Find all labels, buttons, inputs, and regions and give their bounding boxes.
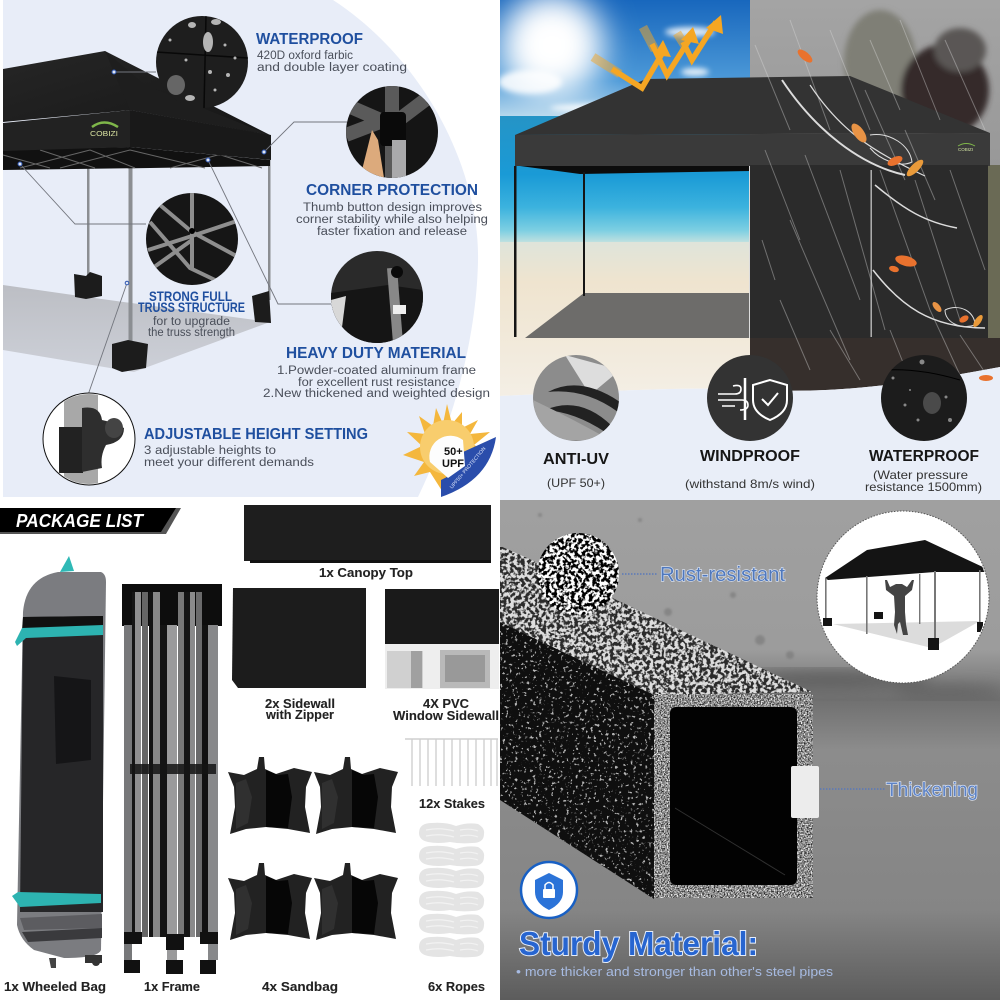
item: ropes (419, 823, 484, 957)
beach (500, 242, 750, 402)
inset person hanging (885, 580, 914, 635)
inset ground (833, 621, 980, 648)
storm sky (750, 0, 1000, 165)
heavy duty detail circle (331, 251, 423, 343)
waterproof label: (Water pressure (873, 468, 968, 482)
corner protection text: corner stability while also helping (296, 214, 488, 226)
truss detail circle (146, 193, 240, 285)
UPF badge: 50+ (444, 446, 463, 458)
tube hollow (670, 707, 797, 885)
waterproof text (256, 31, 407, 74)
rainy background (500, 500, 1000, 1000)
inset canopy (825, 540, 985, 580)
anti-UV label: (UPF 50+) (547, 476, 605, 490)
heavy duty text (263, 345, 490, 400)
UPF badge (403, 404, 496, 497)
scene background (498, 0, 1000, 402)
sky (500, 0, 750, 116)
label: sidewall: with Zipper (265, 708, 334, 722)
item: sidewall (232, 588, 366, 688)
trees (844, 10, 989, 136)
truss under canopy (3, 150, 262, 168)
heavy duty text: 1.Powder-coated aluminum frame (277, 365, 476, 377)
inset tent circle (817, 511, 989, 683)
truss text: for to upgrade (153, 316, 230, 328)
panel: tent features (3, 0, 496, 497)
tent logo (958, 144, 975, 152)
anti-UV label (543, 451, 609, 490)
rust-resistant callout: Rust-resistant (660, 564, 785, 586)
canopy valance (515, 133, 990, 166)
pale lower band (500, 367, 1000, 500)
heavy duty text: HEAVY DUTY MATERIAL (286, 345, 466, 362)
item: canopy top (244, 505, 491, 563)
adjustable height text: 3 adjustable heights to (144, 445, 276, 457)
thickening callout: Thickening (886, 780, 978, 801)
label: stakes: 12x Stakes (419, 797, 485, 811)
label: PVC window sidewall (393, 697, 499, 723)
inset poles and bags (825, 570, 981, 641)
corner protection detail circle (346, 86, 438, 180)
tent poles (514, 166, 585, 337)
label: sidewall: 2x Sidewall (265, 697, 335, 711)
waterproof label: WATERPROOF (869, 448, 979, 465)
thickening marker (791, 766, 819, 818)
truss text: the truss strength (148, 327, 235, 339)
rain (755, 20, 990, 380)
callout dots (18, 70, 266, 285)
sturdy material subtext: • more thicker and stronger than other's steel pipes (516, 965, 833, 979)
windproof icon (707, 355, 793, 441)
clouds and sun (498, 0, 715, 113)
label: canopy top: 1x Canopy Top (319, 566, 413, 580)
leaves (796, 47, 984, 328)
item: sandbags (228, 757, 398, 940)
shield badge (521, 862, 577, 918)
waterproof text: 420D oxford farbic (257, 50, 353, 62)
windproof label: WINDPROOF (700, 448, 800, 465)
panel: package list (0, 505, 499, 994)
corner protection text: Thumb button design improves (303, 202, 482, 214)
windproof label (685, 448, 815, 491)
waterproof label: resistance 1500mm) (865, 480, 982, 494)
item: folded frame (122, 584, 222, 974)
windproof label: (withstand 8m/s wind) (685, 477, 815, 491)
waterproof text: WATERPROOF (256, 31, 363, 48)
item: wheeled bag (12, 556, 106, 968)
sandbags (74, 272, 271, 372)
label: sidewall (265, 697, 335, 722)
wet ground (750, 338, 1000, 391)
package list heading (0, 508, 181, 534)
background droplets (538, 513, 794, 659)
panel: anti-UV, windproof, waterproof (498, 0, 1000, 500)
stray leaf (979, 375, 993, 381)
UPF badge: UPF50+ PROTECTION (449, 446, 488, 490)
zipped sidewall (750, 165, 988, 338)
panel: sturdy material (500, 500, 1000, 1000)
waterproof fabric circle (881, 355, 967, 441)
steel tube (500, 545, 815, 900)
truss text (138, 288, 245, 339)
canopy roof (515, 76, 990, 135)
side grass (988, 165, 1000, 338)
item: PVC window sidewall (385, 589, 499, 689)
logo (90, 122, 118, 138)
label: PVC window sidewall: Window Sidewall (393, 709, 499, 723)
corner protection text (296, 182, 488, 238)
package list heading: PACKAGE LIST (16, 511, 145, 531)
truss text: TRUSS STRUCTURE (138, 299, 245, 315)
anti-UV label: ANTI-UV (543, 451, 609, 468)
anti-UV circle (533, 355, 620, 441)
corner protection text: faster fixation and release (317, 226, 467, 238)
heavy duty text: 2.New thickened and weighted design (263, 388, 490, 400)
label: wheeled bag: 1x Wheeled Bag (4, 980, 106, 994)
callout lines (20, 72, 347, 395)
UPF badge: UPF (442, 458, 464, 470)
tent shade (525, 293, 750, 338)
waterproof label (865, 448, 982, 494)
label: ropes: 6x Ropes (428, 980, 485, 994)
adjustable height detail circle (43, 390, 135, 490)
ground shadow (3, 285, 270, 372)
label: frame: 1x Frame (144, 980, 200, 994)
logo: COBIZI (90, 131, 118, 138)
adjustable height text: meet your different demands (144, 457, 314, 469)
truss text: STRONG FULL (149, 288, 232, 304)
label: sandbag: 4x Sandbag (262, 980, 338, 994)
waterproof detail circle (156, 16, 248, 108)
arrow heads (654, 15, 723, 57)
canopy valance (3, 110, 130, 151)
rust-resistant close-up (535, 530, 621, 616)
back and side poles (87, 147, 270, 342)
corner protection text: CORNER PROTECTION (306, 182, 478, 199)
heavy duty text: for excellent rust resistance (298, 377, 455, 389)
tent illustration (3, 51, 271, 372)
sturdy material heading: Sturdy Material: (519, 925, 758, 962)
blurred wet ground (730, 670, 1000, 698)
waterproof text: and double layer coating (257, 62, 407, 74)
canopy roof (3, 51, 270, 135)
tent logo: COBIZI (958, 147, 973, 152)
item: stakes (405, 739, 498, 786)
adjustable height text: ADJUSTABLE HEIGHT SETTING (144, 426, 368, 443)
pale blue background shape (3, 0, 478, 497)
label: PVC window sidewall: 4X PVC (423, 697, 469, 711)
UV deflection arrows (593, 22, 716, 88)
sea (500, 116, 750, 246)
canopy underside (520, 166, 750, 174)
tube side face (500, 620, 655, 900)
adjustable height text (144, 426, 368, 469)
wind swirls (782, 80, 985, 328)
tube top face (500, 545, 815, 697)
tube end face (654, 694, 813, 898)
